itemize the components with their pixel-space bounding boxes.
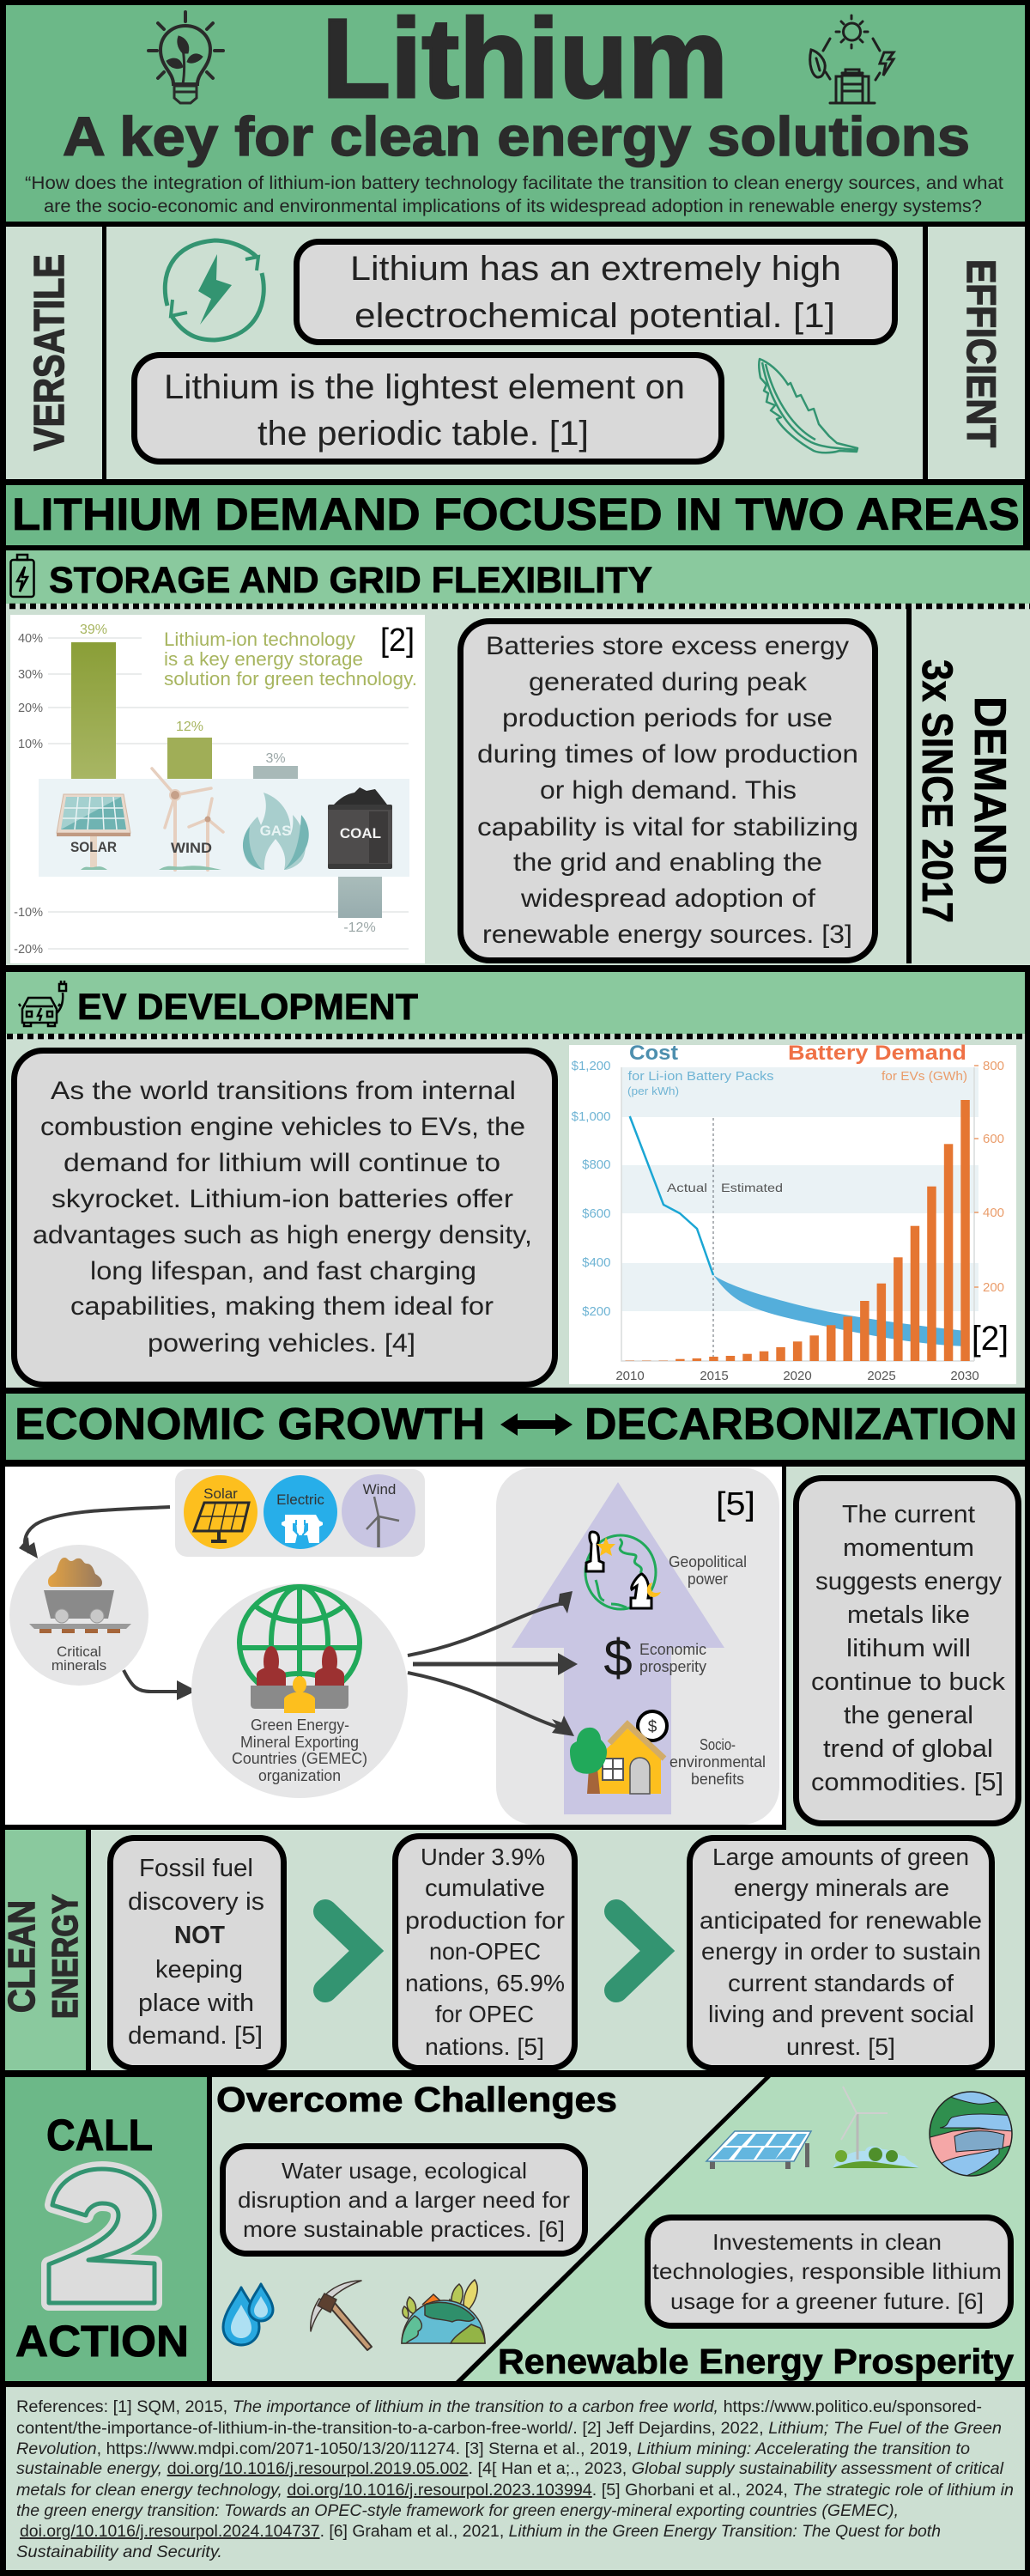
minerals uses box: Electric [276,1492,324,1508]
icon: battery [10,555,34,597]
callout: batteries store excess energy: or high demand. This [540,776,797,805]
callout: large amounts of minerals: anticipated for renewable [700,1907,982,1934]
section heading: economic growth and decarbonization: ECONOMIC GROWTH [15,1400,485,1449]
callout: EV transition: skyrocket. Lithium-ion batteries offer [52,1185,513,1213]
heading: overcome challenges: Overcome Challenges [216,2080,617,2119]
bar chart: energy growth: is a key energy storage [164,648,363,670]
icon: recharge cycle bolt [165,240,264,340]
icon: water drops [223,2284,273,2345]
bar chart: energy growth: 3% [265,751,286,766]
callout: cumulative production [395,1836,575,2068]
panel: references [6,2387,1025,2570]
icon: socio-environmental house: Socio- [700,1736,736,1753]
panel: versatile and efficient [6,227,1025,479]
bar chart: energy growth: 10% [18,738,43,751]
chart: cost and battery demand: $200 [582,1304,611,1319]
research question [25,173,1003,216]
icon: gas flame: GAS [260,823,291,839]
callout: large amounts of minerals: energy minerals are [734,1874,949,1901]
chart: cost and battery demand: (per kWh) [627,1084,679,1097]
section heading: EV development [6,972,1025,1034]
chart: cost and battery demand: 2025 [867,1369,896,1383]
chart: cost and battery demand: Estimated [721,1181,783,1194]
section heading: storage and grid flexibility [6,550,1030,604]
critical minerals [9,1545,148,1686]
callout: batteries store excess energy: the grid and enabling the [513,848,822,877]
panel: references: the green energy transition: Towards an OPEC-style framework for green energy-mineral exporting countries (GEMEC), [16,2502,899,2520]
callout: EV transition [14,1051,554,1384]
icon: solar array [706,2131,811,2169]
icon: economic prosperity: $ [603,1629,633,1686]
panel: momentum: litihum will [846,1635,971,1662]
icon: wind turbine landscape [833,2087,919,2168]
bar chart: energy growth: 12% [176,720,203,734]
chart: cost and battery demand: $1,000 [572,1109,611,1124]
chart: cost and battery demand: [2] [972,1320,1009,1358]
callout: electrochemical potential: electrochemical potential. [1] [354,297,835,335]
callout: batteries store excess energy: during times of low production [477,740,858,769]
panel: momentum: commodities. [5] [811,1769,1003,1796]
icon: solar panel: SOLAR [70,839,117,855]
arrow: chevron two [616,1911,657,1990]
GEMEC organization: Mineral Exporting [240,1734,359,1751]
callout: fossil fuel discovery: demand. [5] [128,2022,263,2050]
panel: references: References: [1] SQM, 2015, The importance of lithium in the transition to a carbon free world, https://www.politico.eu/sponsored- [16,2398,982,2416]
callout: EV transition: long lifespan, and fast charging [90,1257,476,1285]
label: action: ACTION [15,2317,189,2366]
icon: solar panel [57,794,130,870]
callout: cumulative production: nations. [5] [425,2033,544,2060]
icon: hydro dam [927,2092,1014,2178]
icon: socio-environmental house [570,1711,766,1794]
critical minerals: minerals [52,1657,106,1674]
panel: momentum: continue to buck [811,1668,1006,1696]
section heading: lithium demand: LITHIUM DEMAND FOCUSED IN TWO AREAS [12,489,1020,540]
panel: references: Revolution, https://www.mdpi.com/2071-1050/13/20/11274. [3] Sterna et al., 2019, Lithium mining: Accelerating the transition to [16,2440,970,2458]
callout: fossil fuel discovery: Fossil fuel [139,1855,253,1882]
bar chart: energy growth: -20% [14,943,43,957]
chart: cost and battery demand: Actual [667,1181,707,1194]
callout: lightest element: the periodic table. [1] [258,415,589,453]
callout: cumulative production: Under 3.9% [421,1844,545,1870]
minerals uses box: Wind [363,1481,396,1498]
callout: lightest element [134,355,721,462]
panel: references: metals for clean energy technology, doi.org/10.1016/j.resourpol.2023.103994 . [5] Ghorbani et al., 2024, The strategic role of lithium in [16,2482,1014,2500]
icon: pickaxe [311,2281,372,2350]
label: versatile: VERSATILE [27,254,73,451]
outcomes panel [496,1467,779,1825]
icon: feather [759,359,857,453]
section heading: economic growth and decarbonization: DECARBONIZATION [585,1400,1017,1449]
panel: storage and grid [6,604,1030,965]
callout: EV transition: powering vehicles. [4] [148,1329,415,1358]
icon: socio-environmental house: $ [648,1718,657,1736]
callout: investments: Investements in clean [712,2229,942,2255]
bar chart: energy growth: 39% [80,623,107,637]
graphic: number two [49,2169,154,2303]
bar chart: energy growth: -12% [343,920,376,935]
section heading: EV development: EV DEVELOPMENT [77,987,418,1028]
icon: economic prosperity [603,1629,706,1686]
label: efficient: EFFICIENT [959,259,1004,447]
chart: cost and battery demand: for EVs (GWh) [882,1069,967,1084]
panel: momentum: metals like [847,1601,970,1629]
callout: water usage [223,2147,585,2253]
minerals uses box [175,1469,425,1557]
research question: are the socio-economic and environmental implications of its widespread adoption in renewable energy systems? [44,197,982,216]
label: 3x since 2017: 3x SINCE 2017 [913,659,961,923]
callout: batteries store excess energy [460,622,876,960]
bar chart: energy growth: 20% [18,702,43,715]
section heading: storage and grid flexibility: STORAGE AND GRID FLEXIBILITY [49,560,652,601]
icon: energy cycle [810,15,894,103]
panel: clean energy [1,1830,1025,2070]
GEMEC organization: Green Energy- [251,1716,349,1734]
callout: batteries store excess energy: capability is vital for stabilizing [477,813,858,841]
panel: momentum: momentum [843,1534,974,1562]
callout: large amounts of minerals: energy in order to sustain [701,1938,981,1965]
chart: cost and battery demand: 800 [983,1059,1004,1073]
bar chart: energy growth: [2] [380,623,415,659]
callout: large amounts of minerals: living and prevent social [708,2001,974,2027]
callout: EV transition: combustion engine vehicles to EVs, the [40,1113,525,1141]
callout: lightest element: Lithium is the lightest element on [164,368,685,406]
callout: EV transition: advantages such as high energy density, [33,1221,532,1249]
callout: investments: technologies, responsible lithium [652,2258,1002,2284]
GEMEC organization: organization [258,1767,341,1784]
callout: water usage: more sustainable practices. [6] [243,2216,565,2242]
callout: electrochemical potential: Lithium has an extremely high [350,250,841,288]
label: demand: DEMAND [965,696,1015,885]
chart: cost and battery demand: 2015 [700,1369,729,1383]
header panel [6,0,1025,222]
chart: cost and battery demand: 2020 [783,1369,812,1383]
bar chart: energy growth: solution for green technology. [164,668,417,690]
callout: fossil fuel discovery: NOT [174,1922,225,1949]
icon: economic prosperity: prosperity [639,1658,706,1675]
research question: “How does the integration of lithium-ion battery technology facilitate the transition to clean energy sources, and what [25,173,1003,193]
callout: large amounts of minerals: unrest. [5] [786,2033,895,2060]
callout: EV transition: demand for lithium will continue to [64,1149,500,1177]
icon: wind turbines [152,769,223,870]
heading: renewable energy prosperity: Renewable Energy Prosperity [498,2342,1014,2381]
chart: cost and battery demand: 2030 [950,1369,979,1383]
chart: cost and battery demand [569,1042,1016,1384]
callout: fossil fuel discovery [110,1838,283,2068]
callout: cumulative production: nations, 65.9% [405,1970,565,1996]
label: clean energy: CLEAN [1,1900,43,2013]
icon: socio-environmental house: benefits [691,1771,744,1788]
panel: momentum: The current [842,1501,975,1528]
arrow: chevron one [325,1911,367,1990]
panel: references: Sustainability and Security. [16,2543,222,2561]
label: call: CALL [46,2111,153,2160]
icon: socio-environmental house: environmental [670,1753,766,1771]
panel: references: sustainable energy, doi.org/10.1016/j.resourpol.2019.05.002 . [4[ Han et a;., 2023, Global supply sustainability assessment of critical [16,2460,1004,2478]
panel: momentum: suggests energy [815,1568,1002,1595]
label: clean energy [1,1894,85,2019]
callout: large amounts of minerals: current standards of [728,1970,954,1996]
chart: cost and battery demand: 2010 [615,1369,645,1383]
callout: water usage: disruption and a larger need for [238,2187,570,2213]
minerals uses box: Solar [203,1485,238,1502]
icon: earth with house [402,2280,485,2343]
chart: cost and battery demand: 600 [983,1132,1004,1146]
panel: momentum: trend of global [823,1735,993,1763]
callout: water usage: Water usage, ecological [282,2158,527,2184]
icon: gas flame [243,793,309,870]
GEMEC organization [191,1583,408,1798]
GEMEC organization: Countries (GEMEC) [232,1750,367,1767]
panel: momentum [786,1467,1025,1830]
callout: large amounts of minerals: Large amounts of green [712,1844,969,1870]
icon: coal barrel: COAL [340,825,381,841]
chart: cost and battery demand: 200 [983,1280,1004,1295]
arrows: GEMEC to outcomes [408,1591,578,1736]
callout: EV transition: capabilities, making them ideal for [70,1292,494,1321]
icon: light bulb with plant [148,12,223,103]
bar chart: energy growth: Lithium-ion technology [164,629,355,650]
arrow: minerals to GEMEC [124,1670,197,1700]
callout: batteries store excess energy: renewable energy sources. [3] [482,920,852,949]
section heading: economic growth and decarbonization [6,1394,1025,1460]
icon: geopolitical globe [585,1532,747,1609]
callout: batteries store excess energy: generated during peak [529,668,808,696]
callout: fossil fuel discovery: discovery is [128,1888,264,1916]
chart: cost and battery demand: Battery Demand [788,1042,966,1065]
callout: investments: usage for a greener future. [6] [670,2288,984,2314]
panel: call to action [5,2065,1025,2383]
chart: cost and battery demand: $400 [582,1255,611,1270]
label: clean energy: ENERGY [45,1894,85,2019]
icon: economic prosperity: Economic [639,1641,706,1658]
callout: batteries store excess energy: widespread adoption of [520,884,816,913]
callout: batteries store excess energy: Batteries store excess energy [486,632,849,660]
icon: coal barrel [328,787,392,869]
chart: cost and battery demand: for Li-ion Battery Packs [628,1069,774,1084]
chart: cost and battery demand: 400 [983,1206,1004,1220]
chart: cost and battery demand: $600 [582,1206,611,1221]
bar chart: energy growth: 30% [18,668,43,682]
arrow: uses to minerals [19,1507,170,1558]
critical minerals: Critical [57,1643,101,1660]
callout: cumulative production: cumulative [425,1874,545,1901]
panel: EV development [6,1034,1025,1388]
outcomes panel: [5] [716,1486,755,1522]
icon: geopolitical globe: power [688,1571,728,1588]
icon: electric car [19,981,66,1026]
icon: geopolitical globe: Geopolitical [669,1553,747,1571]
callout: electrochemical potential [297,242,894,342]
callout: investments [647,2217,1011,2325]
callout: fossil fuel discovery: place with [138,1990,254,2017]
callout: batteries store excess energy: production periods for use [502,704,833,732]
callout: cumulative production: non-OPEC [429,1938,541,1965]
callout: cumulative production: production for [405,1907,565,1934]
chart: cost and battery demand: $1,200 [572,1059,611,1073]
subtitle: A key for clean energy solutions [63,106,970,167]
panel: references: doi.org/10.1016/j.resourpol.2024.104737 . [6] Graham et al., 2021, Lithium in the Green Energy Transition: The Quest for both [20,2523,941,2541]
chart: cost and battery demand: Cost [629,1042,678,1065]
panel: momentum: the general [844,1702,973,1729]
chart: cost and battery demand: $800 [582,1157,611,1172]
panel: references: content/the-importance-of-lithium-in-the-transition-to-a-carbon-free-world/. [2] Jeff Dejardins, 2022, Lithium; The Fuel of the Green [16,2420,1002,2438]
diagram: green energy minerals [5,1467,782,1825]
icon: double arrow [500,1413,573,1436]
callout: large amounts of minerals [690,1838,992,2068]
callout: cumulative production: for OPEC [435,2001,534,2027]
bar chart: energy growth: 40% [18,632,43,646]
icon: wind turbines: WIND [171,840,212,856]
bar chart: energy growth [10,615,425,963]
bar chart: energy growth: -10% [14,906,43,920]
callout: fossil fuel discovery: keeping [155,1956,243,1984]
callout: EV transition: As the world transitions from internal [51,1077,516,1105]
